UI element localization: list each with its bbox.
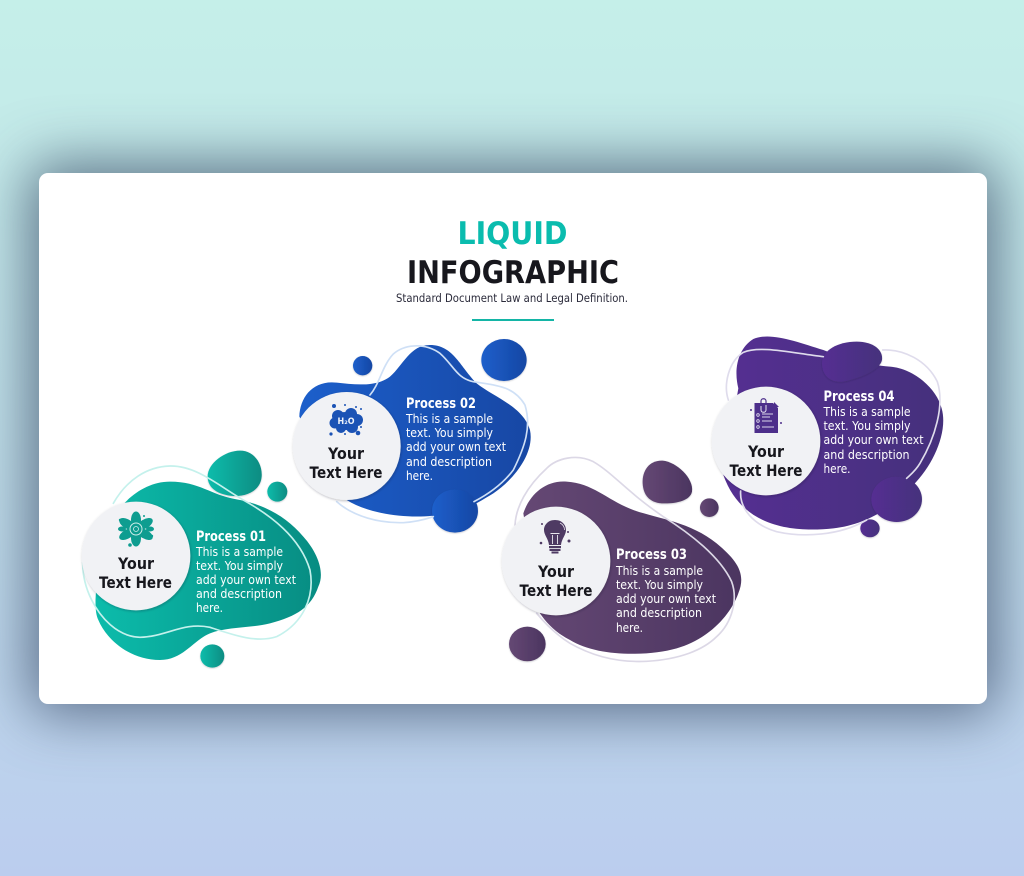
panel: process 01	[82, 451, 321, 668]
description: and description	[196, 586, 282, 601]
title underline	[472, 319, 554, 321]
description	[615, 547, 716, 635]
panel: process 04	[712, 336, 943, 537]
description: text. You simply	[196, 558, 284, 573]
description: Process 03	[616, 547, 687, 563]
slide card	[39, 173, 987, 704]
circle label: Your	[537, 562, 574, 581]
icon: clipboard checklist	[750, 399, 782, 433]
description: This is a sample	[823, 404, 911, 419]
liquid blob 04	[712, 336, 943, 537]
description: add your own text	[616, 591, 716, 606]
label circle	[82, 502, 190, 610]
circle label: Your	[747, 442, 784, 461]
description: add your own text	[824, 432, 924, 447]
title line: infographic: INFOGRAPHIC	[407, 255, 619, 291]
label circle	[502, 507, 610, 615]
panel: process 03	[502, 457, 741, 661]
description: Process 02	[406, 396, 476, 412]
description: text. You simply	[616, 577, 704, 592]
description: text. You simply	[406, 425, 494, 440]
description: This is a sample	[195, 544, 283, 559]
description: Process 04	[824, 389, 895, 405]
circle label: Text Here	[310, 463, 383, 482]
icon: h2o cloud	[329, 404, 363, 436]
circle label	[99, 554, 172, 592]
icon: h2o cloud: H₂O	[338, 417, 354, 427]
subtitle: Standard Document Law and Legal Definition.	[396, 291, 628, 305]
title line: liquid: LIQUID	[458, 216, 568, 252]
description	[405, 396, 506, 483]
description	[195, 529, 296, 615]
description: add your own text	[406, 439, 506, 454]
description: here.	[406, 468, 433, 483]
liquid blob 01	[82, 451, 321, 668]
circle label	[310, 444, 383, 482]
panel: process 02	[293, 339, 531, 533]
circle label: Your	[327, 444, 364, 463]
circle label: Text Here	[730, 461, 803, 480]
description: and description	[616, 605, 702, 620]
description: Process 01	[196, 529, 266, 545]
label circle	[293, 392, 401, 500]
circle label	[730, 442, 803, 480]
label circle	[712, 387, 820, 495]
description: add your own text	[196, 572, 296, 587]
circle label: Text Here	[99, 573, 172, 592]
description: and description	[406, 454, 492, 469]
description: here.	[824, 461, 850, 476]
description	[823, 389, 924, 476]
description: text. You simply	[824, 418, 911, 433]
icon: atom flower	[117, 512, 155, 547]
liquid blob 02	[293, 339, 531, 533]
circle label	[520, 562, 593, 600]
title	[407, 216, 619, 291]
description: here.	[616, 620, 643, 635]
description: This is a sample	[405, 411, 493, 426]
circle label: Your	[117, 554, 154, 573]
description: and description	[824, 447, 910, 462]
icon: light bulb	[540, 520, 570, 554]
liquid blob 03	[502, 457, 741, 661]
circle label: Text Here	[520, 581, 593, 600]
description: here.	[196, 600, 223, 615]
description: This is a sample	[615, 563, 703, 578]
